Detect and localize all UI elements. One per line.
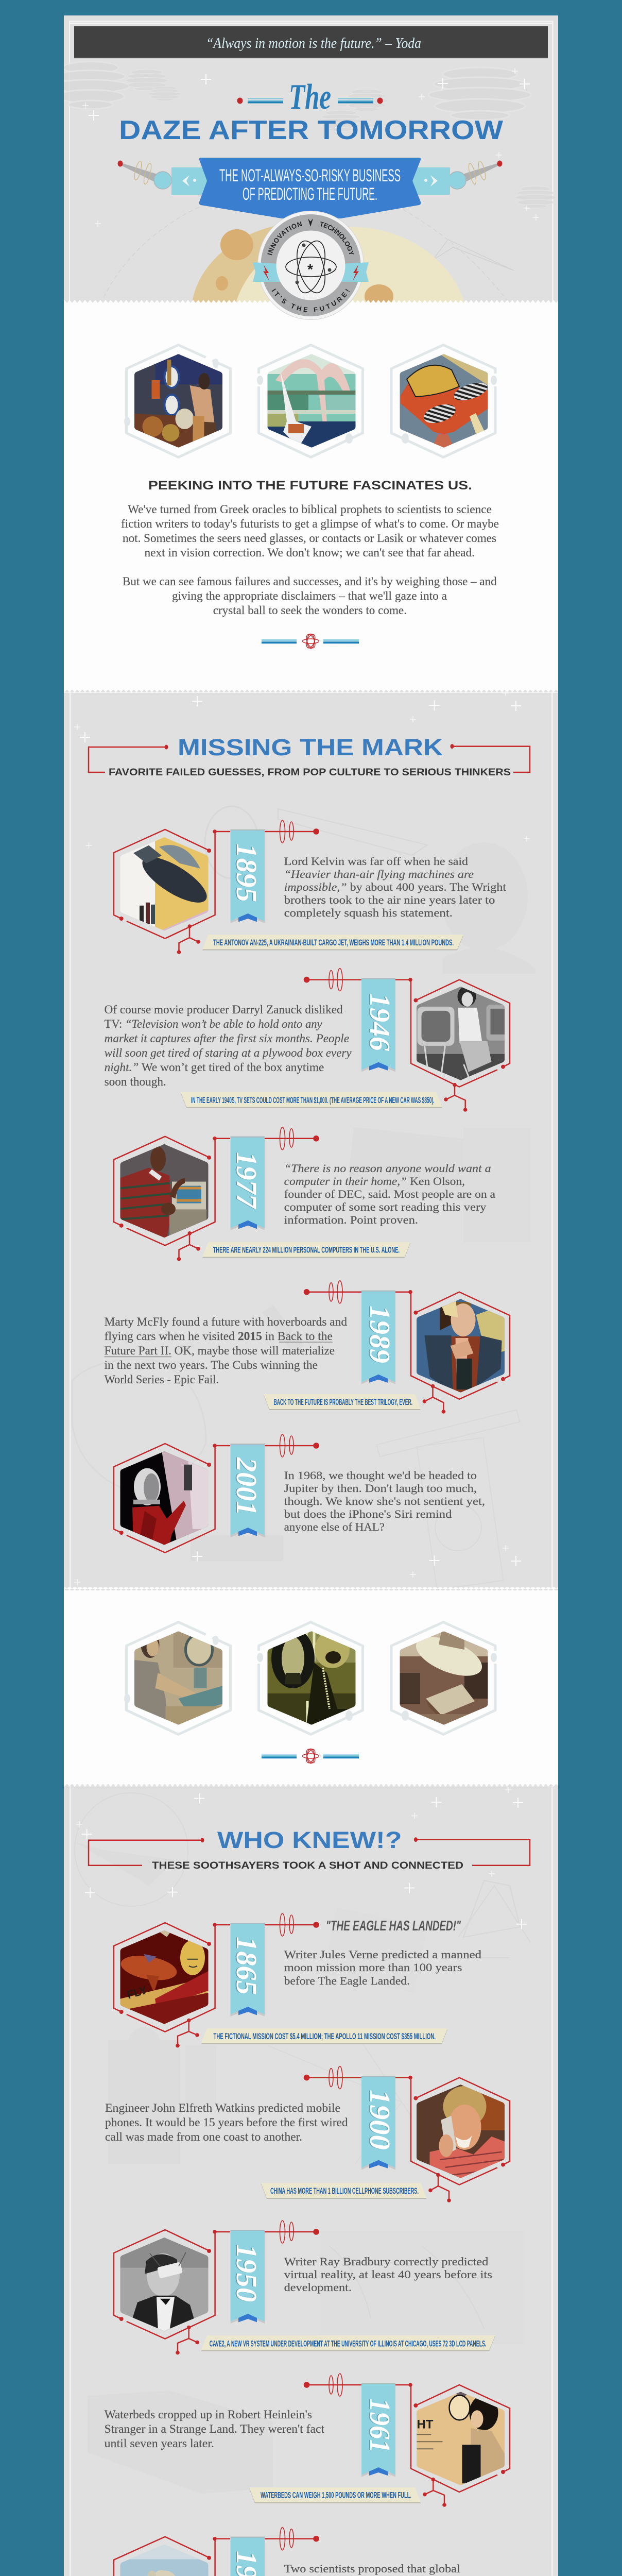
fact tag: THE FICTIONAL MISSION COST $5.4 MILLION; THE APOLLO 11 MISSION COST $355 MILLION. (213, 2031, 436, 2041)
hex frame 1 (124, 1622, 231, 1734)
body text (105, 2102, 348, 2144)
body text: “There is no reason anyone would want a (284, 1162, 491, 1175)
body text: Jupiter by then. Don't laugh too much, (284, 1482, 477, 1495)
body text (284, 2255, 492, 2294)
title: The: The (289, 77, 331, 117)
image: fly to the moon poster (119, 1930, 209, 2025)
row 1: hexagon images (124, 345, 497, 457)
image: teen with brick phone (416, 2084, 505, 2179)
panel: section 1 gray header (52, 15, 558, 304)
fact tag: CHINA HAS MORE THAN 1 BILLION CELLPHONE SUBSCRIBERS. (270, 2186, 419, 2196)
body text: though. We know she's not sentient yet, (284, 1495, 485, 1507)
hex frame 3 (391, 1622, 497, 1734)
image: man with VR goggles (120, 2237, 209, 2332)
emblem badge: IT'S THE FUTURE! (272, 289, 350, 312)
hex frame 2 (257, 345, 362, 457)
year: 1946 (364, 993, 395, 1051)
timeline item: 1977 (114, 1127, 495, 1261)
emblem badge (253, 211, 369, 320)
intro paragraph 2 (123, 575, 497, 617)
timeline item: 2001 (114, 1434, 485, 1553)
section heading: missing the mark: FAVORITE FAILED GUESSES, FROM POP CULTURE TO SERIOUS THINKERS (109, 767, 511, 778)
panel: section 1 white intro (64, 300, 558, 693)
image: polar bear (120, 2544, 209, 2576)
year: 1989 (364, 1306, 395, 1363)
year: 1961 (364, 2398, 395, 2453)
image: video phone (267, 1629, 356, 1725)
body text: Engineer John Elfreth Watkins predicted mobile (105, 2102, 340, 2115)
antennae and side tabs (117, 160, 503, 195)
section heading: who knew: WHO KNEW!? (217, 1827, 402, 1853)
body text (105, 2408, 324, 2450)
body text (284, 1162, 495, 1226)
body text: development. (284, 2281, 352, 2294)
body text: impossible,” by about 400 years. The Wright (284, 880, 506, 893)
timeline item: 1950 (114, 2221, 495, 2354)
section heading: missing the mark: MISSING THE MARK (178, 734, 443, 760)
body text: World Series - Epic Fail. (105, 1373, 219, 1386)
section heading: missing the mark (89, 734, 530, 778)
body text: call was made from one coast to another. (105, 2130, 302, 2144)
faint sketches backdrop (72, 806, 535, 1590)
timeline item: 1865 (114, 1913, 481, 2047)
timeline item: 1989 (105, 1281, 510, 1414)
intro paragraph 2: But we can see famous failures and successes, and it's by weighing those – and (123, 575, 497, 588)
hex frame 2 (257, 1622, 362, 1734)
timeline item: 1946 (105, 969, 510, 1112)
fact tag (264, 1384, 445, 1414)
body text: founder of DEC, said. Most people are on a (284, 1188, 495, 1200)
stars (74, 690, 530, 1585)
body text (105, 1003, 352, 1089)
row 2: hexagon images (124, 1622, 497, 1734)
top dark bar with quote (74, 26, 548, 59)
panel: white image band 2 (64, 1587, 558, 1787)
intro paragraph 2: giving the appropriate disclaimers – that we'll gaze into a (172, 589, 447, 603)
body text: computer of some sort reading this very (284, 1200, 486, 1213)
body text: Of course movie producer Darryl Zanuck disliked (105, 1003, 343, 1016)
intro paragraph 1: not. Sometimes the seers need glasses, or contacts or Lasik or whatever comes (123, 532, 496, 545)
intro paragraph 1: We've turned from Greek oracles to biblical prophets to scientists to science (128, 503, 492, 516)
body text: Waterbeds cropped up in Robert Heinlein's (105, 2408, 312, 2421)
year: 1900 (364, 2090, 395, 2150)
body text: night.” We won’t get tired of the box anytime (105, 1061, 324, 1074)
body text: information. Point proven. (284, 1213, 418, 1226)
image: waterbed ad (416, 2391, 505, 2486)
body text: market it captures after the first six months. People (105, 1032, 349, 1045)
banner: subtitle (199, 158, 421, 218)
intro paragraph 2: crystal ball to seek the wonders to come. (213, 604, 407, 617)
image: woman with television (416, 986, 507, 1081)
body text: before The Eagle Landed. (284, 1974, 410, 1987)
heading block: peeking into the future: PEEKING INTO THE FUTURE FASCINATES US. (148, 479, 472, 493)
year: 1895 (230, 843, 262, 902)
fact tag (176, 2019, 447, 2047)
divider: atom (262, 1748, 359, 1764)
body text: anyone else of HAL? (284, 1520, 385, 1533)
body text: but does the iPhone's Siri remind (284, 1507, 452, 1520)
year: 1977 (230, 1152, 262, 1209)
image: flying car (400, 353, 490, 448)
panel: who knew (64, 1784, 558, 2576)
stars (82, 68, 539, 227)
body text: moon mission more than 100 years (284, 1961, 462, 1974)
year: 2001 (230, 1457, 262, 1516)
banner: subtitle: OF PREDICTING THE FUTURE. (243, 184, 377, 204)
image: fly to the moon poster: FLY (125, 1984, 149, 2002)
image: futuristic building (267, 353, 356, 448)
section heading: who knew (89, 1827, 530, 1871)
timeline item: 1961 (105, 2374, 510, 2507)
image: astronaut and HAL (120, 1451, 209, 1546)
body text (284, 855, 506, 919)
body text: in the next two years. The Cubs winning the (105, 1359, 318, 1372)
planet (193, 226, 464, 303)
fact tag (177, 1231, 410, 1261)
intro paragraph 1 (121, 503, 499, 560)
fact tag (261, 2173, 451, 2202)
intro paragraph 1: next in vision correction. We don't know; we can't see that far ahead. (144, 546, 475, 560)
body text: soon though. (105, 1075, 166, 1089)
year: 1950 (230, 2244, 262, 2302)
image: flying airship (120, 837, 213, 931)
section heading: who knew: THESE SOOTHSAYERS TOOK A SHOT AND CONNECTED (152, 1860, 463, 1871)
timeline item: 1900 (105, 2066, 510, 2202)
faint futuristic towers backdrop (52, 62, 556, 304)
timeline item: 1895 (114, 820, 506, 954)
body text: virtual reality, at least 40 years before its (284, 2268, 492, 2281)
title: Daze After Tomorrow: DAZE AFTER TOMORROW (119, 115, 504, 145)
title: The (237, 77, 383, 117)
body text: Future Part II. OK, maybe those will materialize (105, 1344, 335, 1358)
emblem badge: * (307, 261, 313, 277)
fact tag (176, 2326, 495, 2354)
body text: flying cars when he visited 2015 in Back to the (105, 1330, 333, 1343)
image: Marty McFly (416, 1298, 505, 1393)
body text: TV: “Television won’t be able to hold onto any (105, 1018, 322, 1031)
body text: Writer Jules Verne predicted a manned (284, 1948, 481, 1961)
fact tag: WATERBEDS CAN WEIGH 1,500 POUNDS OR MORE WHEN FULL. (261, 2490, 411, 2500)
body text: Two scientists proposed that global (284, 2562, 460, 2575)
body text: will soon get tired of staring at a plywood box every (105, 1046, 352, 1060)
body text: brothers took to the air nine years later to (284, 893, 495, 906)
panel: missing the mark (64, 690, 558, 1590)
body text: computer in their home,” Ken Olson, (284, 1175, 465, 1188)
body text: In 1968, we thought we'd be headed to (284, 1469, 477, 1482)
fact tag (181, 1083, 468, 1112)
fact tag (249, 2478, 446, 2507)
intro paragraph 1: fiction writers to today's futurists to get a glimpse of what's to come. Or maybe (121, 517, 499, 531)
body text (284, 2562, 507, 2576)
body text: Marty McFly found a future with hoverboards and (105, 1315, 347, 1329)
body text (105, 1315, 347, 1386)
image: man with home computer (120, 1144, 209, 1239)
divider: atom (262, 633, 359, 649)
image: woman typing (134, 1631, 222, 1725)
body text: Writer Ray Bradbury correctly predicted (284, 2255, 488, 2268)
image: flying saucer house (400, 1629, 488, 1725)
fact tag (177, 924, 463, 954)
year: 1865 (230, 1937, 262, 1995)
stars (76, 1787, 532, 2576)
fact tag: THERE ARE NEARLY 224 MILLION PERSONAL COMPUTERS IN THE U.S. ALONE. (213, 1245, 400, 1255)
fact tag: BACK TO THE FUTURE IS PROBABLY THE BEST TRILOGY, EVER. (274, 1397, 412, 1407)
body text (284, 1948, 481, 1987)
body text (284, 1469, 485, 1533)
body text: Lord Kelvin was far off when he said (284, 855, 468, 868)
body text: Stranger in a Strange Land. They weren't fact (105, 2422, 324, 2436)
body text: until seven years later. (105, 2437, 214, 2450)
callout heading: "THE EAGLE HAS LANDED!" (326, 1918, 461, 1934)
body text: completely squash his statement. (284, 906, 453, 919)
faint sketches backdrop (75, 1793, 535, 2576)
body text: phones. It would be 15 years before the first wired (105, 2116, 348, 2129)
emblem badge: TECHNOLOGY (320, 222, 354, 255)
body text: “Heavier than-air flying machines are (284, 868, 474, 880)
image: waterbed ad: HT (417, 2417, 434, 2431)
image: man at control panel (134, 353, 222, 448)
emblem badge: INNOVATION (267, 222, 302, 256)
banner: subtitle: THE NOT-ALWAYS-SO-RISKY BUSINESS (219, 166, 401, 185)
top dark bar with quote: “Always in motion is the future.” – Yoda (206, 35, 421, 52)
hex frame 3 (391, 345, 497, 457)
timeline item: 1999 (114, 2528, 507, 2576)
hex frame 1 (124, 345, 231, 457)
